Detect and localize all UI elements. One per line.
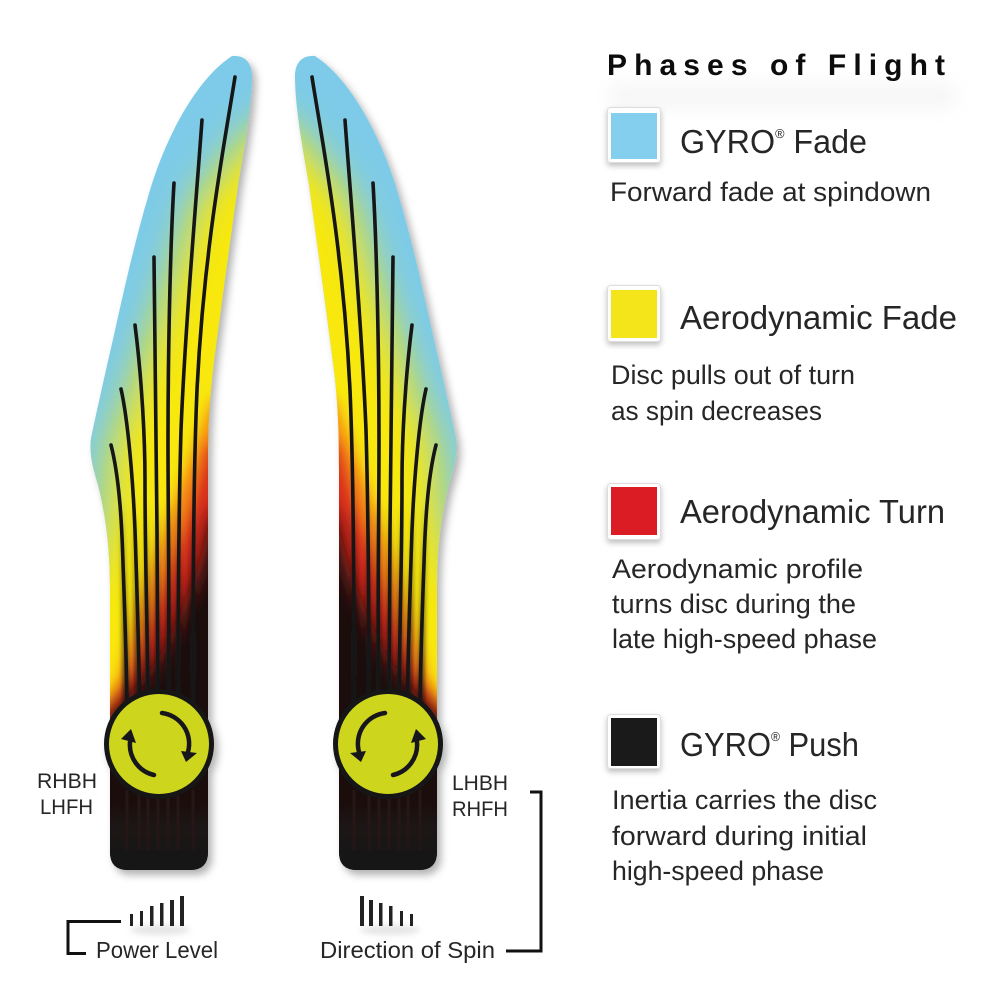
legend: GYRO Fade: Fade [784,123,867,160]
icon: power level bars [130,896,190,935]
legend: Aerodynamic Turn: Aerodynamic Turn [680,493,945,530]
legend: GYRO Fade [608,108,931,207]
right spin labels [452,772,508,821]
legend: GYRO Push: GYRO [680,726,777,763]
left spin labels: RHBH [37,770,97,793]
icon: direction of spin bars [360,896,420,935]
power level label: Power Level [96,937,218,963]
legend: Aerodynamic Fade: as spin decreases [611,396,822,426]
legend: Aerodynamic Turn: turns disc during the [612,589,856,619]
legend: Aerodynamic Fade: Disc pulls out of turn [611,360,855,390]
bracket: direction of spin [506,792,541,951]
legend: Aerodynamic Fade [608,286,957,426]
direction of spin label: Direction of Spin [320,937,495,963]
title shadow [610,84,955,108]
legend: GYRO Fade: Forward fade at spindown [610,177,931,207]
title: Phases of Flight [607,49,945,82]
legend: GYRO Push [608,714,877,886]
legend: GYRO Push: ® [771,729,780,744]
legend: Aerodynamic Turn [608,484,945,654]
left blade: flight path chart [50,40,300,890]
right spin labels: RHFH [452,798,508,821]
right spin labels: LHBH [452,772,508,795]
legend: Aerodynamic Turn: late high-speed phase [612,624,877,654]
legend: Aerodynamic Fade: Aerodynamic Fade [680,299,957,336]
legend: GYRO Fade: GYRO [680,123,777,160]
left spin labels [37,770,97,819]
legend: GYRO Push: Inertia carries the disc [612,785,877,815]
bracket: power level [68,922,121,954]
legend: Aerodynamic Turn: Aerodynamic profile [612,554,863,584]
legend: GYRO Push: forward during initial [612,821,867,851]
legend: GYRO Fade: ® [775,126,785,141]
left spin labels: LHFH [40,796,93,819]
legend: GYRO Push: Push [780,726,859,763]
legend: GYRO Push: high-speed phase [612,856,824,886]
right blade: flight path chart [247,40,497,890]
